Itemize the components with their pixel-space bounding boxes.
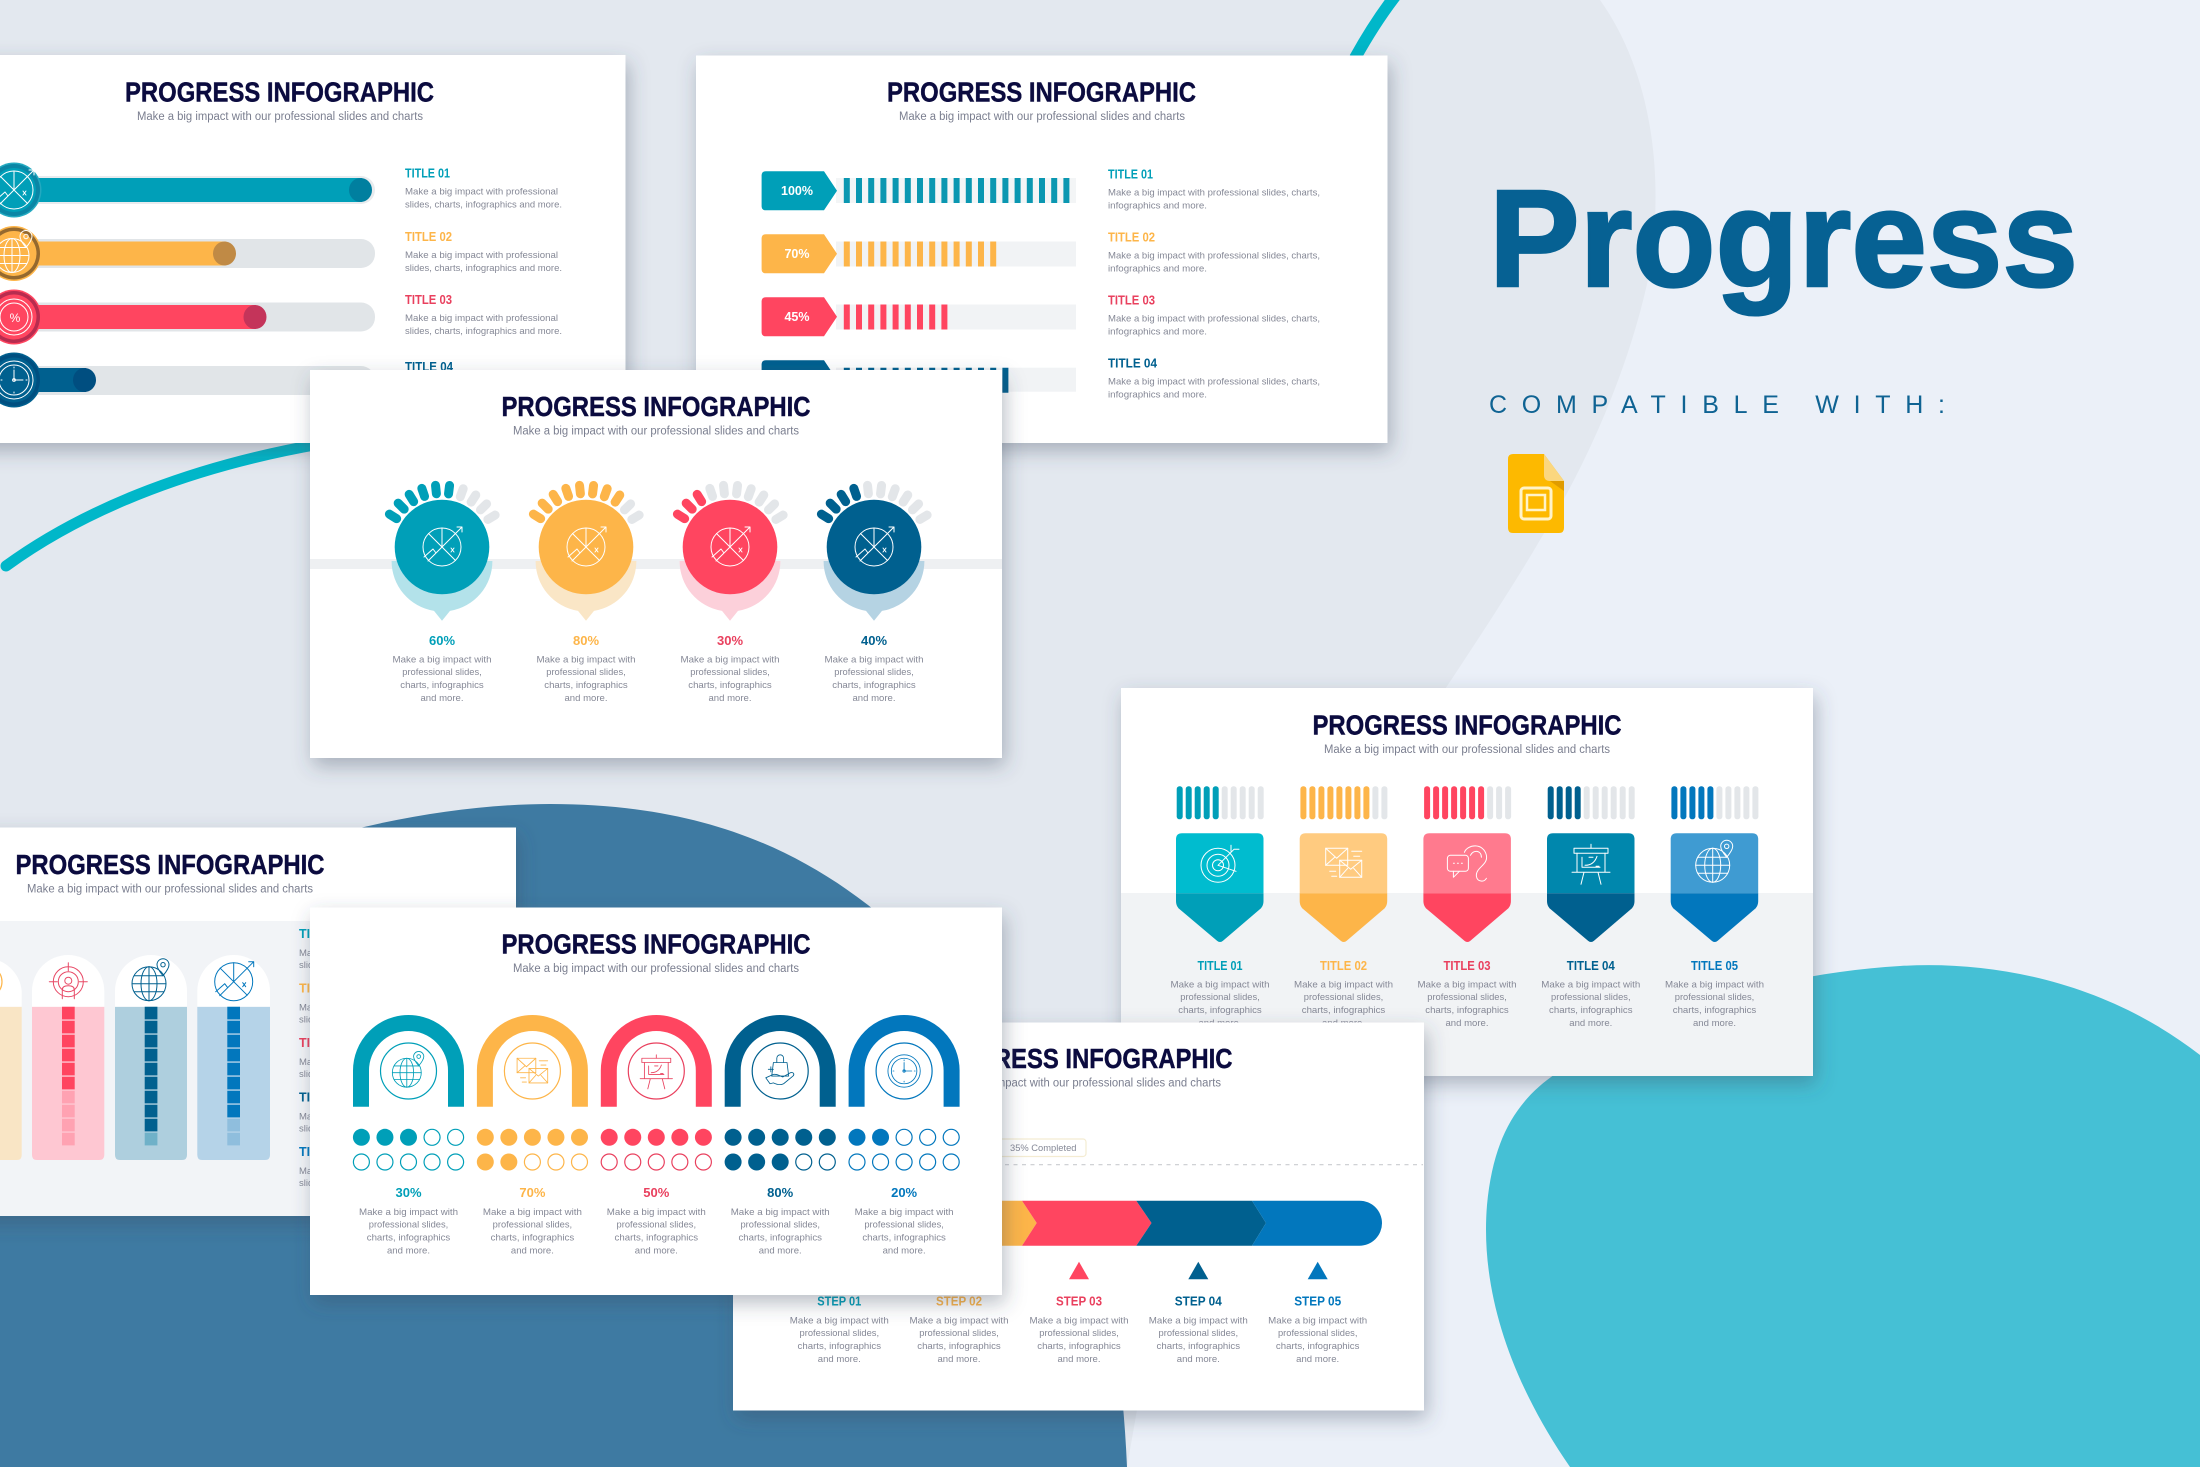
main title: Progress [1489, 162, 2078, 316]
arrow text 04: TITLE 04 [1567, 959, 1615, 973]
gauge text 40%: charts, infographics [832, 680, 916, 691]
step text 02: and more. [938, 1354, 980, 1365]
arrow text 05: professional slides, [1675, 992, 1754, 1003]
tick text 4 [1108, 356, 1320, 400]
arch 30%: professional slides, [369, 1220, 448, 1231]
panel: slide arches [310, 908, 1002, 1295]
panel: slide arrows [1121, 688, 1813, 1076]
arrow text 03: Make a big impact with [1418, 979, 1516, 990]
heading: PROGRESS INFOGRAPHIC [502, 391, 810, 422]
subheading: Make a big impact with our professional slides and charts [899, 111, 1185, 123]
tick text 3: Make a big impact with professional slides, charts, [1108, 314, 1320, 325]
arrow text 01: professional slides, [1180, 992, 1260, 1003]
column teal [115, 955, 187, 1160]
tick text 4: Make a big impact with professional slides, charts, [1108, 377, 1320, 388]
step text 04 [1149, 1295, 1248, 1365]
arch 30%: Make a big impact with [359, 1207, 458, 1218]
arch 70% [477, 1023, 588, 1257]
tick text 2 [1108, 230, 1320, 274]
gauge text 40%: Make a big impact with [824, 654, 924, 665]
step text 01 [790, 1295, 889, 1365]
step text 05: charts, infographics [1276, 1341, 1360, 1352]
row text 1: slides, charts, infographics and more. [405, 200, 562, 210]
completed pill: 35% Completed [1010, 1143, 1076, 1154]
gauge text 80%: Make a big impact with [536, 654, 636, 665]
clipped list text [299, 927, 376, 1189]
arrow text 04 [1541, 959, 1640, 1029]
clipped list text: Make a big impact [299, 948, 376, 959]
column blue [197, 955, 270, 1160]
subheading: Make a big impact with our professional slides and charts [137, 111, 423, 123]
heading: PROGRESS INFOGRAPHIC [125, 77, 434, 108]
arch 30%: and more. [387, 1246, 430, 1257]
clipped list text: Make a big impact [299, 1166, 376, 1177]
gauge text 30%: and more. [708, 693, 752, 704]
arrow text 05: charts, infographics [1673, 1005, 1757, 1016]
arrow text 01 [1170, 959, 1270, 1029]
tick text 3: infographics and more. [1108, 326, 1207, 338]
gauge text 30%: charts, infographics [688, 680, 772, 691]
arrow text 03: charts, infographics [1425, 1005, 1509, 1016]
dark blue blob [0, 804, 1127, 1467]
arrow card 05 [1671, 786, 1758, 942]
arch 70%: charts, infographics [491, 1233, 574, 1244]
clipped list text: slides, charts [299, 960, 355, 971]
gauge text 80%: professional slides, [546, 667, 626, 678]
row text 1: Make a big impact with professional [405, 187, 558, 198]
gauge text 60%: professional slides, [402, 667, 482, 678]
completed pill [940, 1139, 1086, 1156]
row text 3: TITLE 03 [405, 293, 452, 307]
gauge text 40%: and more. [852, 693, 896, 704]
panel: slide bars [0, 55, 626, 443]
arrow text 05: and more. [1693, 1018, 1736, 1029]
step text 05: STEP 05 [1294, 1295, 1341, 1309]
compatible with label: COMPATIBLE WITH: [1489, 391, 1945, 419]
step text 02 [910, 1295, 1008, 1365]
gauge text 30%: 30% [717, 633, 743, 648]
tick text 1: TITLE 01 [1108, 168, 1153, 182]
gauge 60% [389, 485, 495, 621]
clipped list text: Make a big impact [299, 1112, 376, 1122]
progress row 4 [0, 352, 375, 408]
tick row 2: 70% [784, 247, 810, 261]
tick row 3 [762, 297, 1076, 336]
arrow text 01: Make a big impact with [1170, 979, 1270, 990]
arrow text 04: Make a big impact with [1541, 979, 1640, 990]
arch 80%: charts, infographics [738, 1233, 822, 1244]
arch 30%: charts, infographics [367, 1233, 451, 1244]
step text 03: and more. [1058, 1354, 1100, 1365]
row text 2: slides, charts, infographics and more. [405, 263, 562, 274]
heading: PROGRESS INFOGRAPHIC [887, 77, 1196, 108]
step text 05: and more. [1296, 1354, 1339, 1365]
step text 03: charts, infographics [1037, 1341, 1121, 1352]
arch 80%: Make a big impact with [731, 1207, 830, 1218]
arrow text 02: Make a big impact with [1294, 979, 1393, 990]
clipped list text: TITLE 05 [299, 1145, 351, 1159]
arrow card 02 [1300, 786, 1387, 942]
arch 50%: 50% [643, 1185, 670, 1200]
step text 05: professional slides, [1278, 1328, 1357, 1339]
arch 20%: professional slides, [864, 1220, 944, 1231]
clipped list text: TITLE 01 [299, 927, 351, 941]
gauge text 60% [392, 633, 492, 704]
step text 03: STEP 03 [1056, 1295, 1102, 1309]
arch 20%: charts, infographics [862, 1233, 946, 1244]
teal blob [1486, 965, 2200, 1467]
arrow text 03 [1418, 959, 1516, 1029]
arch 80%: and more. [759, 1246, 802, 1257]
progress row 2 [0, 226, 375, 281]
step text 04: charts, infographics [1157, 1341, 1240, 1352]
tick text 3: TITLE 03 [1108, 294, 1155, 308]
gauge text 80%: charts, infographics [544, 680, 628, 691]
tick text 1: infographics and more. [1108, 200, 1207, 212]
step text 04: and more. [1177, 1354, 1220, 1365]
clipped list text: slides, charts [299, 1178, 355, 1189]
clipped list text: slides, charts [299, 1014, 355, 1026]
arrow text 03: and more. [1446, 1018, 1488, 1029]
step text 03: Make a big impact with [1030, 1315, 1128, 1326]
arch 80% [725, 1023, 836, 1257]
arch 50%: charts, infographics [615, 1233, 698, 1244]
subheading: Make a big impact with our professional slides and charts [513, 963, 799, 975]
arch 20%: and more. [883, 1246, 926, 1257]
arch 30%: 30% [395, 1185, 422, 1200]
row text 3: Make a big impact with professional [405, 313, 558, 324]
gauge text 40%: 40% [861, 633, 887, 648]
step text 02: professional slides, [919, 1328, 999, 1339]
row text 1 [405, 166, 562, 210]
gauge text 80%: 80% [573, 633, 599, 648]
arch 80%: 80% [767, 1185, 794, 1200]
progress row 3 [0, 290, 375, 344]
gauge text 40%: professional slides, [834, 667, 914, 678]
arrow card 04 [1547, 786, 1635, 942]
row text 4: TITLE 04 [405, 360, 453, 374]
progress row 3: % [10, 311, 21, 325]
gauge 40% [821, 485, 927, 621]
clipped list text: slides, charts [299, 1069, 355, 1080]
arch 70%: 70% [519, 1185, 546, 1200]
markers [1069, 1262, 1328, 1279]
gauge text 60%: charts, infographics [400, 680, 484, 691]
tick text 2: TITLE 02 [1108, 230, 1155, 244]
step text 02: STEP 02 [936, 1295, 982, 1309]
arch 30% [353, 1023, 464, 1257]
step bar [907, 1201, 1382, 1246]
arrow card 03 [1423, 786, 1511, 942]
gauge text 60%: Make a big impact with [392, 654, 492, 665]
progress row 1 [0, 162, 375, 218]
step text 01: charts, infographics [798, 1341, 881, 1352]
panel: slide ticks [696, 56, 1388, 443]
step text 01: Make a big impact with [790, 1315, 889, 1326]
arrow text 02: TITLE 02 [1320, 959, 1367, 973]
arch 70%: Make a big impact with [483, 1207, 582, 1218]
tick text 3 [1108, 294, 1320, 338]
step text 04: Make a big impact with [1149, 1315, 1248, 1326]
tick row 3: 45% [784, 310, 810, 324]
row text 3: slides, charts, infographics and more. [405, 326, 562, 337]
step text 03 [1030, 1295, 1128, 1365]
arrow text 03: TITLE 03 [1444, 959, 1491, 973]
arch 70%: professional slides, [493, 1220, 572, 1231]
teal curved line top [1355, 0, 1396, 58]
gauge text 60%: 60% [429, 633, 455, 648]
arch 20%: 20% [891, 1185, 918, 1200]
arch 50%: professional slides, [617, 1220, 696, 1231]
step text 03: professional slides, [1039, 1328, 1119, 1339]
subheading: Make a big impact with our professional slides and charts [1324, 744, 1610, 756]
clipped list text: TITLE 03 [299, 1036, 351, 1050]
row text 2 [405, 230, 562, 274]
gauge text 80%: and more. [564, 693, 608, 704]
row text 1: TITLE 01 [405, 166, 450, 180]
arch 80%: professional slides, [740, 1220, 820, 1231]
arrow text 04: professional slides, [1551, 992, 1631, 1003]
subheading: Make a big impact with our professional slides and charts [27, 884, 313, 896]
clipped list text: TITLE 04 [299, 1091, 351, 1105]
column pink [32, 955, 104, 1160]
row text 3 [405, 293, 562, 337]
arch 50%: and more. [635, 1246, 678, 1257]
row text 2: Make a big impact with professional [405, 250, 558, 261]
step text 02: Make a big impact with [910, 1315, 1008, 1326]
step text 02: charts, infographics [917, 1341, 1001, 1352]
arrow text 03: professional slides, [1427, 992, 1507, 1003]
gauge 30% [677, 485, 783, 621]
background grey shape [0, 0, 1656, 1467]
gauge text 60%: and more. [420, 693, 464, 704]
arch 70%: and more. [511, 1246, 554, 1257]
tick text 4: TITLE 04 [1108, 356, 1157, 370]
step text 01: and more. [818, 1354, 861, 1365]
arrow text 05: Make a big impact with [1665, 979, 1764, 990]
arch 50% [601, 1023, 712, 1257]
arrow text 01: TITLE 01 [1198, 959, 1243, 973]
arrow text 02 [1294, 959, 1393, 1029]
clipped list text: Make a big impact [299, 1057, 376, 1068]
tick row 1 [762, 171, 1076, 210]
tick text 2: infographics and more. [1108, 264, 1207, 274]
panel: slide columns [0, 828, 516, 1216]
gauge text 80% [536, 633, 636, 704]
step text 04: STEP 04 [1175, 1295, 1222, 1309]
arch 20% [848, 1023, 959, 1257]
arrow text 05 [1665, 959, 1764, 1029]
column gold [0, 958, 22, 1160]
arrow text 02: charts, infographics [1302, 1005, 1386, 1016]
heading: PROGRESS INFOGRAPHIC [16, 849, 324, 880]
tick text 2: Make a big impact with professional slides, charts, [1108, 251, 1320, 262]
gauge text 30% [680, 633, 780, 704]
tick row 1: 100% [781, 184, 813, 198]
arrow text 01: and more. [1198, 1018, 1242, 1029]
subheading: Make a big impact with our professional slides and charts [935, 1078, 1221, 1090]
tick text 1: Make a big impact with professional slides, charts, [1108, 188, 1320, 199]
arrow text 02: and more. [1322, 1018, 1365, 1029]
arch 20%: Make a big impact with [855, 1207, 954, 1218]
arrow text 02: professional slides, [1304, 992, 1383, 1003]
step text 05 [1268, 1295, 1367, 1365]
step text 05: Make a big impact with [1268, 1315, 1367, 1326]
clipped list text: Make a big impact [299, 1002, 376, 1014]
tick text 4: infographics and more. [1108, 390, 1207, 400]
clipped list text: slides, charts [299, 1124, 355, 1134]
arrow text 01: charts, infographics [1178, 1005, 1262, 1016]
teal curved line left [6, 444, 320, 566]
tick text 1 [1108, 168, 1320, 212]
row text 2: TITLE 02 [405, 230, 452, 244]
icon: google slides [1508, 454, 1564, 533]
heading: PROGRESS INFOGRAPHIC [1312, 710, 1622, 740]
arrow text 04: charts, infographics [1549, 1005, 1633, 1016]
arrow card 01 [1176, 786, 1264, 942]
gauge 80% [533, 485, 639, 621]
step text 01: STEP 01 [817, 1295, 861, 1309]
heading: PROGRESS INFOGRAPHIC [924, 1043, 1232, 1074]
panel: slide steps [733, 1022, 1424, 1410]
gauge text 30%: Make a big impact with [680, 654, 780, 665]
heading: PROGRESS INFOGRAPHIC [502, 928, 810, 960]
panel: slide gauges [310, 370, 1002, 758]
clipped list text: TITLE 02 [299, 982, 351, 996]
step text 04: professional slides, [1159, 1328, 1238, 1339]
gauge text 40% [824, 633, 924, 704]
arrow text 04: and more. [1569, 1018, 1612, 1029]
subheading: Make a big impact with our professional slides and charts [513, 426, 799, 438]
arrow text 05: TITLE 05 [1691, 959, 1738, 973]
tick row 4 [762, 360, 1076, 399]
gauge text 30%: professional slides, [690, 667, 770, 678]
step text 01: professional slides, [800, 1328, 879, 1339]
tick row 2 [762, 234, 1076, 273]
arch 50%: Make a big impact with [607, 1207, 706, 1218]
